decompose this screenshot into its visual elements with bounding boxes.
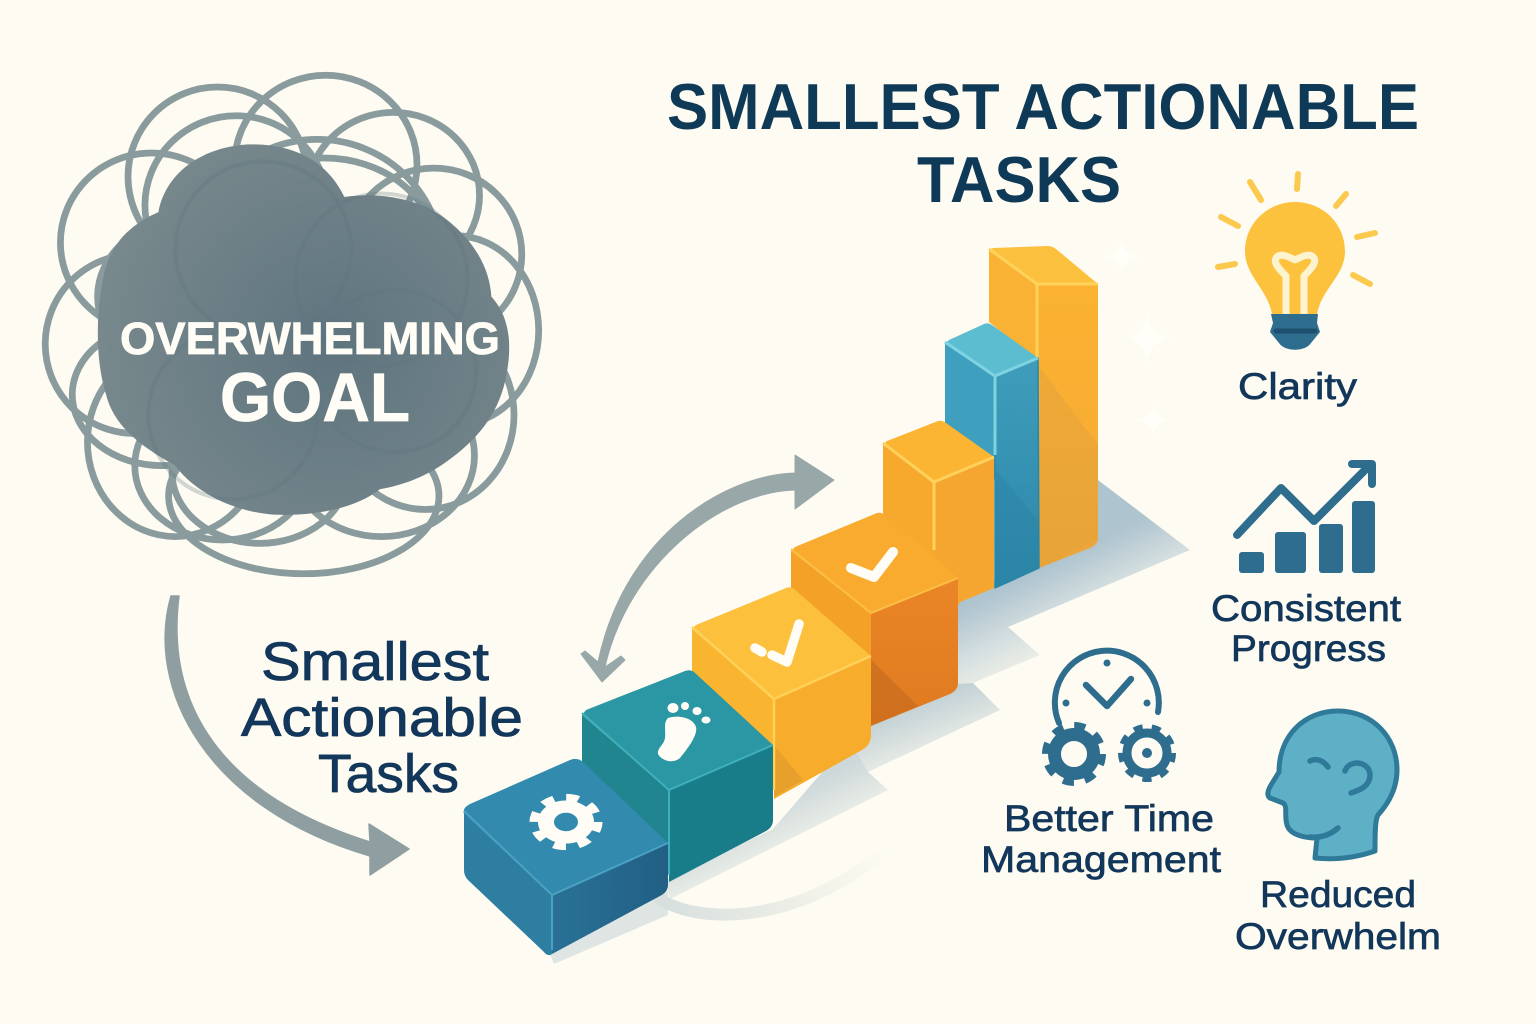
arrow: goal to tasks (165, 596, 409, 875)
icon: check (851, 552, 893, 577)
step 6: blue column (945, 323, 1039, 588)
label: better time management (981, 798, 1222, 880)
benefit: consistent progress (1211, 464, 1402, 669)
label: reduced overwhelm: Overwhelm (1235, 916, 1441, 957)
benefit: better time management (981, 651, 1222, 880)
title: SMALLEST ACTIONABLE (667, 70, 1419, 143)
title (667, 70, 1419, 216)
icon: gear (535, 798, 597, 846)
step 1: blue block with gear (464, 759, 668, 955)
subheading: smallest actionable tasks (241, 632, 523, 804)
icon: check with dash (755, 624, 799, 662)
icon: light bulb (1218, 174, 1375, 350)
blob inner contours (148, 161, 476, 499)
heading: overwhelming goal (120, 313, 500, 436)
icon: calm head (1268, 711, 1397, 859)
label: better time management: Management (981, 839, 1222, 880)
heading: overwhelming goal: GOAL (220, 359, 410, 436)
label: reduced overwhelm (1235, 874, 1441, 957)
heading: overwhelming goal: OVERWHELMING (120, 313, 500, 364)
step 3: yellow block with check (692, 587, 871, 799)
step 5: orange block (883, 421, 994, 605)
label: consistent progress: Consistent (1211, 588, 1402, 629)
label: consistent progress (1211, 588, 1402, 669)
label: reduced overwhelm: Reduced (1260, 874, 1416, 915)
benefit: reduced overwhelm (1235, 711, 1441, 957)
faint arc under steps (660, 848, 888, 915)
subheading: smallest actionable tasks: Smallest (261, 632, 489, 692)
subheading: smallest actionable tasks: Tasks (318, 744, 459, 804)
title: TASKS (917, 143, 1121, 216)
label: clarity: Clarity (1238, 366, 1358, 407)
staircase ground shadow (548, 480, 1190, 964)
benefit: clarity (1218, 174, 1375, 407)
step 7: tall yellow column (989, 246, 1098, 568)
step 2: teal block with footprint (582, 670, 773, 882)
label: better time management: Better Time (1004, 798, 1214, 839)
icon: clock and gears (1046, 651, 1172, 782)
subheading: smallest actionable tasks: Actionable (241, 688, 523, 748)
cycle double arrow (581, 455, 834, 682)
label: consistent progress: Progress (1231, 628, 1386, 669)
cloud blob (98, 144, 509, 515)
sparkles (1106, 240, 1170, 436)
step 4: orange block with check (791, 513, 958, 726)
icon: growth chart (1237, 464, 1375, 573)
icon: footprint (658, 702, 710, 761)
tangled rings (45, 75, 539, 574)
overwhelming goal tangled cloud (45, 75, 539, 574)
